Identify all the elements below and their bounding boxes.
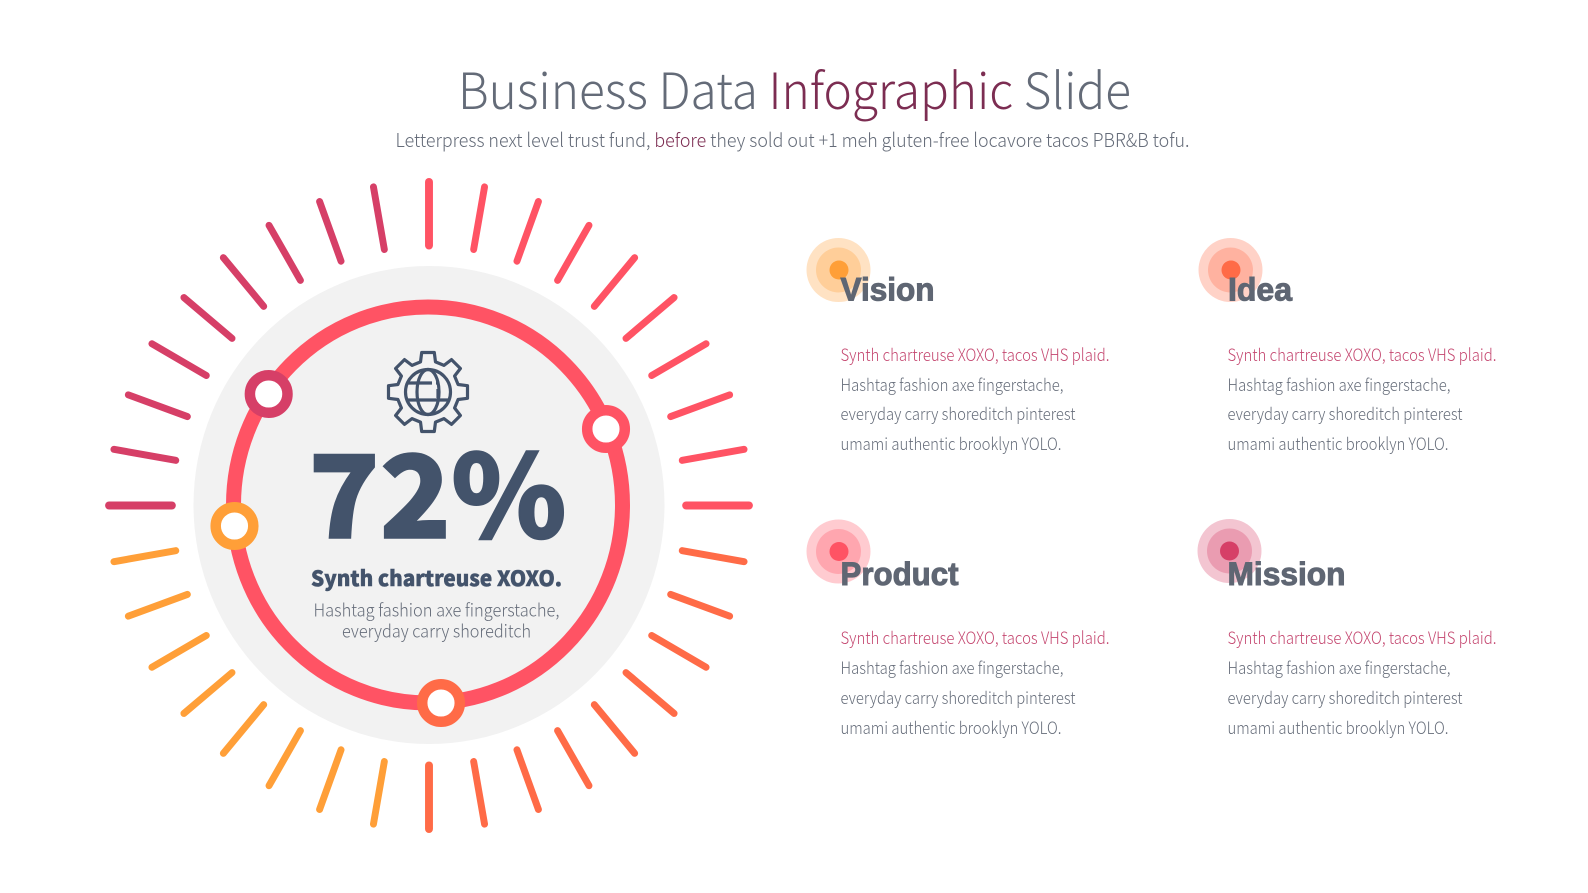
ring node: crimson [250,375,288,413]
text: mission body: Hashtag fashion axe fingerstache, [1228,654,1450,679]
heading: idea: Idea [1228,272,1292,308]
text: product body: Hashtag fashion axe fingerstache, [840,654,1064,679]
panel: mission [1198,519,1496,739]
center description [314,596,560,644]
center description: Hashtag fashion axe fingerstache, [314,596,560,622]
text: idea body: Hashtag fashion axe fingerstache, [1228,371,1450,396]
heading: product: Product [840,556,959,592]
center heading: Synth chartreuse XOXO. [311,563,562,593]
icon: mission target [1198,519,1262,583]
panel: product [806,520,1110,739]
text: idea body: Synth chartreuse XOXO, tacos VHS plaid. [1228,341,1496,366]
panel: vision [806,238,1110,455]
icon: vision target [806,238,870,302]
text: mission body: everyday carry shoreditch pinterest [1228,684,1463,709]
ring node: red [587,410,625,448]
text: idea body: umami authentic brooklyn YOLO. [1228,430,1448,455]
grey central disc [194,266,664,744]
text: product body: everyday carry shoreditch pinterest [840,684,1076,709]
text: vision body: umami authentic brooklyn YOLO. [840,430,1062,455]
ring node: orange [216,507,253,545]
heading: mission: Mission [1228,556,1346,592]
panel: idea [1198,238,1496,455]
subtitle: Letterpress next level trust fund, before they sold out +1 meh gluten-free locavore tacos PBR&B tofu. [396,126,1190,153]
ring node: coral [422,684,460,722]
text: product body: Synth chartreuse XOXO, tacos VHS plaid. [840,624,1110,649]
text: idea body: everyday carry shoreditch pinterest [1228,400,1463,425]
title: Business Data Infographic Slide [458,52,1131,124]
text: idea body [1228,341,1496,455]
text: vision body: Hashtag fashion axe fingerstache, [840,371,1064,396]
text: product body: umami authentic brooklyn YOLO. [840,714,1062,739]
progress ring [234,307,622,703]
text: vision body: everyday carry shoreditch pinterest [840,400,1076,425]
text: vision body: Synth chartreuse XOXO, tacos VHS plaid. [840,341,1110,366]
icon: idea target [1198,238,1262,302]
text: vision body [840,341,1110,455]
text: mission body: umami authentic brooklyn YOLO. [1228,714,1448,739]
text: mission body: Synth chartreuse XOXO, tacos VHS plaid. [1228,624,1496,649]
heading: vision: Vision [840,272,934,308]
icon: gear with globe [388,352,468,432]
text: product body [840,624,1110,739]
radial tick marks [109,182,749,829]
icon: product target [806,520,870,584]
center description: everyday carry shoreditch [342,618,531,644]
text: mission body [1228,624,1496,739]
big percentage: 72% [308,406,566,572]
